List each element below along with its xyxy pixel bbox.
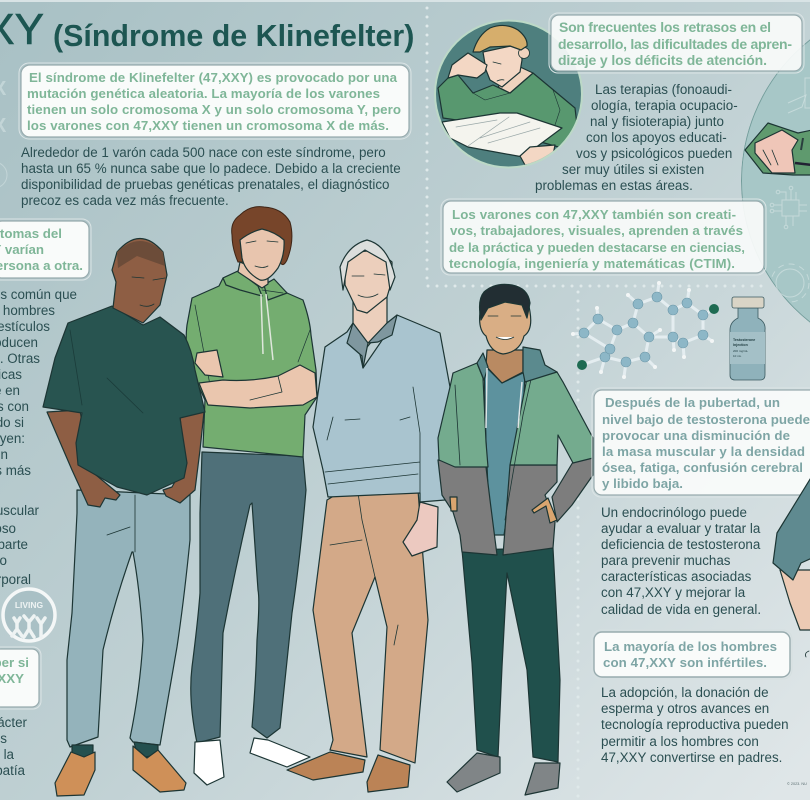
jacket right panel grey bbox=[503, 465, 557, 555]
hand bbox=[403, 502, 438, 556]
text block: symptoms: hombres bbox=[3, 303, 55, 318]
hands bbox=[450, 497, 457, 511]
text block: therapies: Las terapias (fonoaudi- bbox=[595, 82, 732, 97]
hood bbox=[223, 271, 287, 300]
figure: older man in sweater bbox=[287, 240, 450, 792]
arms bbox=[47, 410, 120, 507]
callout: low testosterone: la masa muscular y la densidad bbox=[602, 444, 805, 459]
figure: teen in two-tone jacket bbox=[438, 284, 593, 795]
callout: strengths bbox=[441, 199, 766, 275]
neck bbox=[498, 66, 533, 93]
sweater bbox=[438, 73, 577, 148]
callout: low testosterone: y libido baja. bbox=[602, 476, 683, 491]
logo: Living with XXY bbox=[3, 589, 55, 641]
text block: symptoms: n bbox=[1, 447, 8, 462]
icon: testosterone vial: 10 mL bbox=[733, 354, 742, 358]
jacket upper green bbox=[510, 372, 593, 465]
curly hair base bbox=[232, 207, 292, 265]
text block: endocrinologist: ayudar a evaluar y tratar la bbox=[601, 521, 761, 536]
callout: strengths: tecnología, ingeniería y matemáticas (CTIM). bbox=[449, 256, 735, 271]
icon: circuit chip bbox=[770, 186, 807, 229]
text block: therapies: ser muy útiles si existen bbox=[562, 162, 704, 177]
text block: symptoms: s común que bbox=[0, 287, 77, 302]
callout: developmental delays: Son frecuentes los retrasos en el bbox=[559, 19, 771, 35]
callout: definition: los varones con 47,XXY tienen un cromosoma X de más. bbox=[27, 118, 389, 133]
hair bbox=[473, 25, 527, 52]
icon: gear bbox=[771, 264, 809, 302]
logo: Living with XXY: LIVING bbox=[15, 600, 44, 610]
text block: lower left: la bbox=[4, 747, 15, 762]
callout: infertility bbox=[592, 630, 792, 679]
text block: symptoms: yen: bbox=[0, 431, 25, 446]
faint chromosome icons at left edge bbox=[0, 78, 7, 188]
callout: strengths: de la práctica y pueden destacarse en ciencias, bbox=[449, 240, 745, 255]
text block: prevalence: Alrededor de 1 varón cada 500 nace con este síndrome, pero bbox=[21, 145, 386, 160]
collar bbox=[347, 315, 397, 368]
text block: endocrinologist: para prevenir muchas bbox=[601, 553, 731, 568]
callout: strengths: vos, trabajadores, visuales, aprenden a través bbox=[450, 223, 743, 238]
text block: endocrinologist: características asociadas bbox=[601, 569, 752, 584]
callout: low testosterone: Después de la pubertad, un bbox=[605, 395, 780, 410]
callout: strengths: Los varones con 47,XXY también son creati- bbox=[452, 207, 736, 222]
trousers bbox=[313, 485, 428, 763]
text block: endocrinologist: Un endocrinólogo puede bbox=[601, 505, 747, 520]
text block: prevalence bbox=[21, 145, 401, 208]
hood bbox=[477, 347, 557, 382]
head bbox=[112, 238, 167, 323]
icon: testosterone vial: 200 mg/mL bbox=[733, 349, 748, 353]
jacket left panel green bbox=[438, 363, 488, 467]
jeans bbox=[67, 490, 190, 747]
callout: definition: mutación genética aleatoria. La mayoría de los varones bbox=[27, 86, 380, 101]
text block: parenthood: tecnología reproductiva pueden bbox=[601, 717, 789, 732]
hand holding pencil bbox=[745, 123, 810, 175]
figure: man in dark t-shirt bbox=[43, 238, 205, 796]
icon: testosterone vial bbox=[730, 297, 765, 380]
text block: therapies: problemas en estas áreas. bbox=[535, 178, 693, 193]
hand under arm bbox=[195, 350, 223, 377]
text block: endocrinologist: deficiencia de testosterona bbox=[601, 537, 761, 552]
sweater bbox=[313, 315, 450, 502]
hand on head bbox=[448, 53, 487, 78]
illustration: boy reading bbox=[434, 20, 583, 168]
text block: lower left bbox=[0, 715, 28, 778]
text block: parenthood: esperma y otros avances en bbox=[601, 701, 769, 716]
callout: infertility: La mayoría de los hombres bbox=[604, 639, 777, 654]
text block: prevalence: disponibilidad de pruebas genéticas prenatales, el diagnóstico bbox=[21, 177, 390, 192]
text block: endocrinologist bbox=[601, 505, 761, 617]
text block: endocrinologist: calidad de vida en general. bbox=[601, 602, 761, 617]
callout: definition: tienen un solo cromosoma X y un solo cromosoma Y, pero bbox=[27, 102, 401, 117]
callout: developmental delays bbox=[549, 13, 804, 73]
copyright note: © 2023. NU bbox=[787, 782, 807, 786]
head bbox=[480, 300, 531, 354]
right decorative circle with icons bbox=[741, 40, 810, 322]
callout: developmental delays: desarrollo, las dificultades de apren- bbox=[558, 36, 792, 52]
jacket left panel grey bbox=[438, 460, 497, 555]
shirt bbox=[43, 306, 205, 495]
text block: parenthood: La adopción, la donación de bbox=[601, 685, 769, 700]
text block: therapies: vos y psicológicos pueden bbox=[576, 146, 732, 161]
socks bbox=[72, 742, 158, 760]
text block: therapies: ología, terapia ocupacio- bbox=[591, 98, 738, 113]
face bbox=[483, 44, 522, 87]
neck bbox=[353, 295, 387, 352]
text block: parenthood: 47,XXY convertirse en padres. bbox=[601, 750, 782, 765]
hoodie bbox=[186, 271, 317, 457]
text block: prevalence: hasta un 65 % nunca sabe que lo padece. Debido a la creciente bbox=[21, 161, 401, 176]
shoes bbox=[287, 752, 365, 780]
text block: therapies: nal y fisioterapia) junto bbox=[590, 114, 724, 129]
title bbox=[0, 5, 414, 54]
text block: lower left: s bbox=[0, 731, 7, 746]
hand on book bbox=[520, 145, 555, 165]
text block: therapies bbox=[535, 82, 738, 193]
crossed forearm bbox=[199, 365, 317, 408]
trousers bbox=[462, 548, 560, 762]
shirt and neck bbox=[484, 365, 525, 535]
text block: symptoms bbox=[0, 287, 77, 587]
callout: low testosterone bbox=[592, 388, 810, 497]
callout: low testosterone: nivel bajo de testosterona puede bbox=[602, 412, 810, 427]
figure: partial arm at right edge bbox=[773, 476, 810, 657]
icon: testosterone molecule bbox=[571, 281, 719, 379]
figure: man in green hoodie bbox=[186, 207, 317, 785]
neck bbox=[238, 262, 268, 288]
text block: endocrinologist: con 47,XXY y mejorar la bbox=[601, 585, 746, 600]
jacket right sleeve bbox=[552, 456, 593, 522]
head bbox=[345, 251, 392, 313]
shoes bbox=[447, 753, 500, 792]
text block: therapies: con los apoyos educati- bbox=[586, 130, 727, 145]
face bbox=[240, 229, 284, 280]
text block: prevalence: precoz es cada vez más frecuente. bbox=[21, 193, 229, 208]
trousers bbox=[191, 452, 306, 743]
callout: definition: El síndrome de Klinefelter (47,XXY) es provocado por una bbox=[29, 70, 398, 85]
callout: developmental delays: dizaje y los déficits de atención. bbox=[558, 52, 767, 68]
callout: symptoms vary bbox=[0, 219, 91, 280]
text block: symptoms: . Otras bbox=[0, 351, 40, 366]
icon: testosterone vial: Testosterone bbox=[733, 338, 755, 342]
callout: definition bbox=[19, 63, 411, 139]
icon: tablet sketch bbox=[805, 78, 810, 108]
shoes bbox=[55, 752, 95, 796]
callout: low testosterone: ósea, fatiga, confusión cerebral bbox=[602, 460, 803, 475]
title: (Síndrome de Klinefelter) bbox=[53, 19, 414, 53]
callout: symptoms vary: tomas del bbox=[0, 226, 62, 241]
icon: testosterone vial: Injection bbox=[733, 343, 748, 347]
text block: parenthood: permitir a los hombres con bbox=[601, 734, 759, 749]
callout: infertility: con 47,XXY son infértiles. bbox=[603, 655, 767, 670]
callout: low testosterone: provocar una disminución de bbox=[602, 428, 790, 443]
callout: knowing if you have XXY bbox=[0, 647, 41, 709]
text block: parenthood bbox=[601, 685, 789, 765]
book bbox=[442, 113, 562, 157]
